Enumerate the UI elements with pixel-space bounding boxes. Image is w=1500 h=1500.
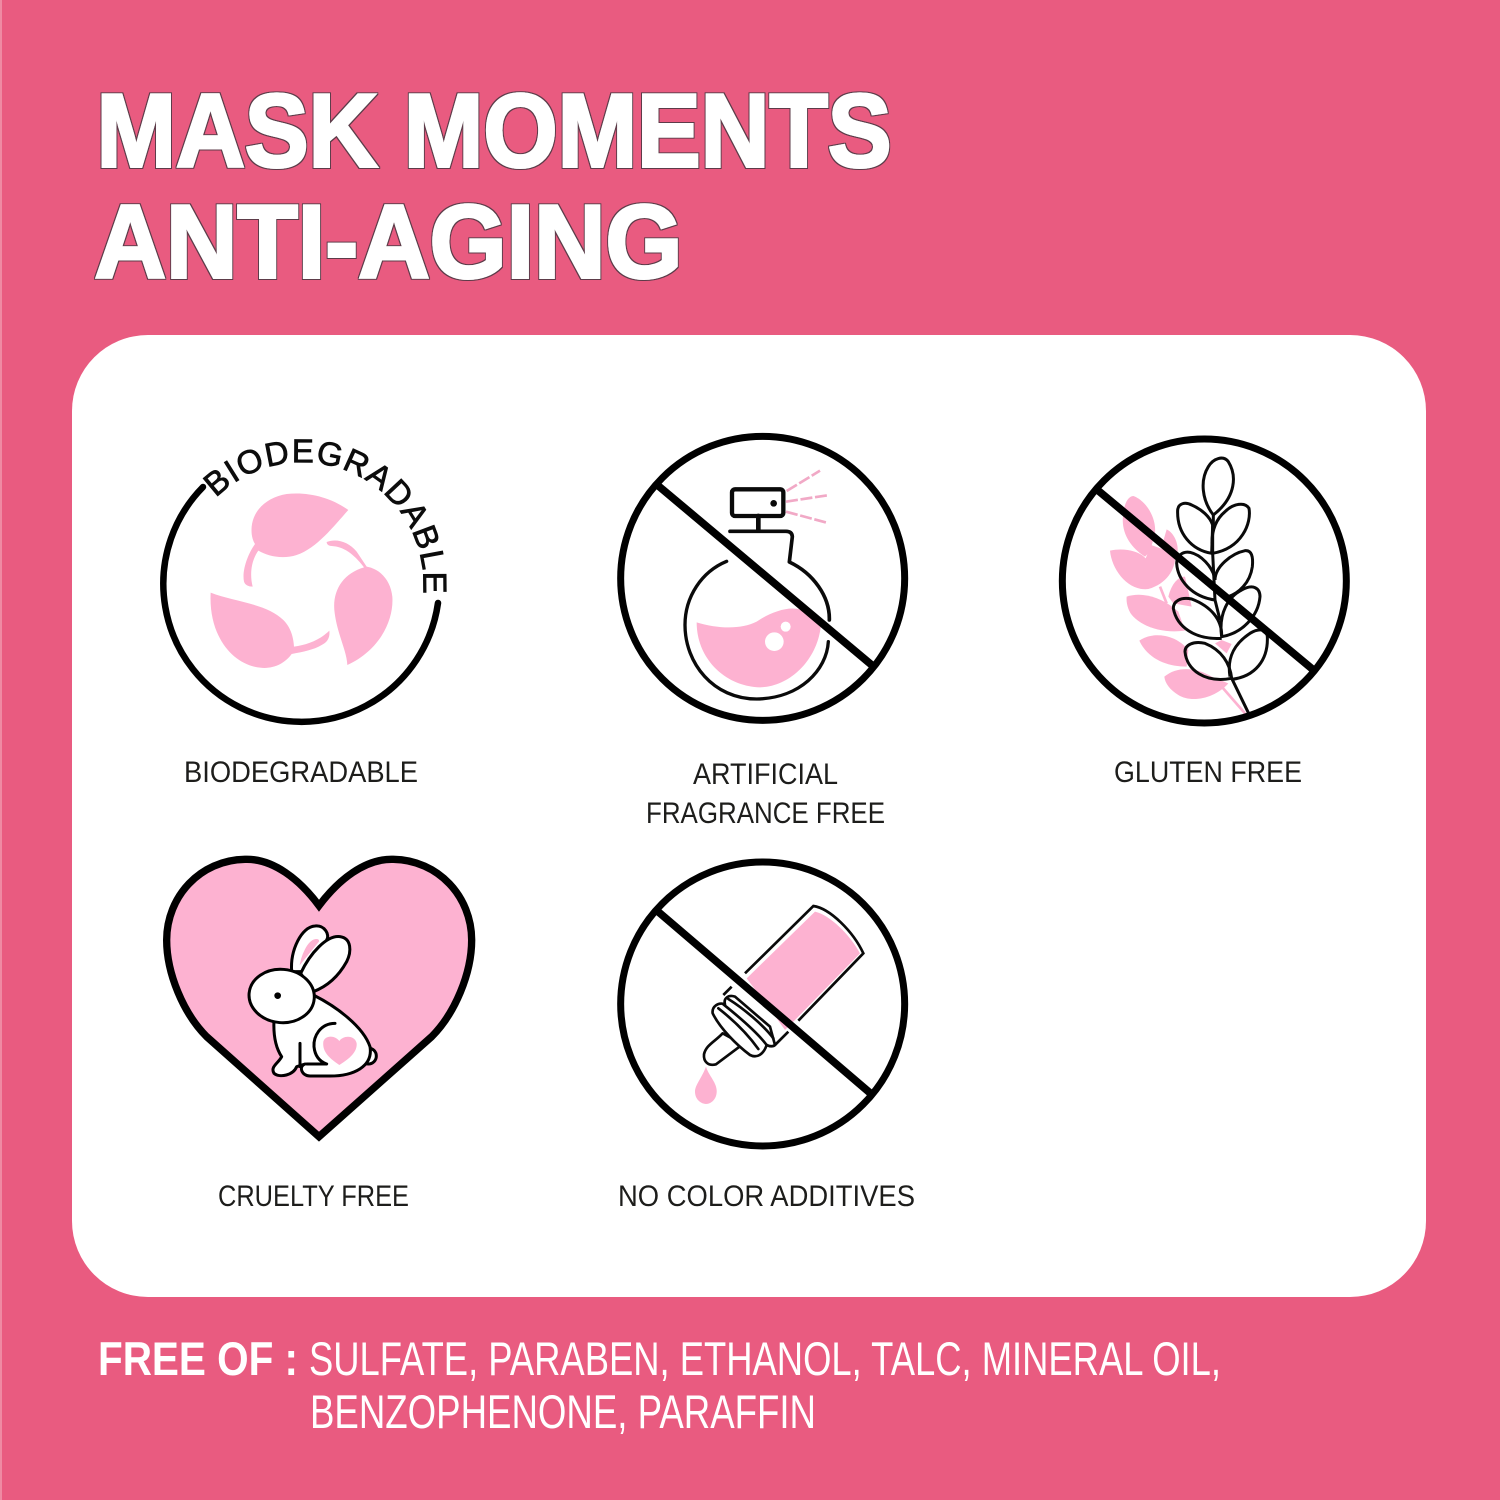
label: gluten free: GLUTEN FREE [1114,756,1302,789]
footer: free of list: SULFATE, PARABEN, ETHANOL, TALC, MINERAL OIL, [309,1332,1221,1385]
panel: white card [72,335,1426,1297]
label: biodegradable: BIODEGRADABLE [184,756,418,789]
footer: free of list [98,1332,1221,1438]
icon: cruelty free heart and rabbit [167,859,472,1137]
label: no color additives: NO COLOR ADDITIVES [618,1180,915,1213]
title: ANTI-AGING [94,184,682,300]
title [94,74,892,300]
icon: biodegradable [160,439,447,726]
icon: no artificial fragrance [621,436,905,720]
footer: free of list: BENZOPHENONE, PARAFFIN [310,1385,816,1438]
title: MASK MOMENTS [96,74,892,190]
icon: no color additives [621,862,905,1146]
label: artificial fragrance free: FRAGRANCE FREE [646,797,885,830]
label: artificial fragrance free: ARTIFICIAL [693,758,838,791]
icon: gluten free [1062,439,1346,723]
icon: biodegradable: BIODEGRADABLE [202,439,447,593]
label: cruelty free: CRUELTY FREE [218,1180,409,1213]
footer: free of list: FREE OF : [98,1332,298,1385]
label: artificial fragrance free [646,758,885,830]
